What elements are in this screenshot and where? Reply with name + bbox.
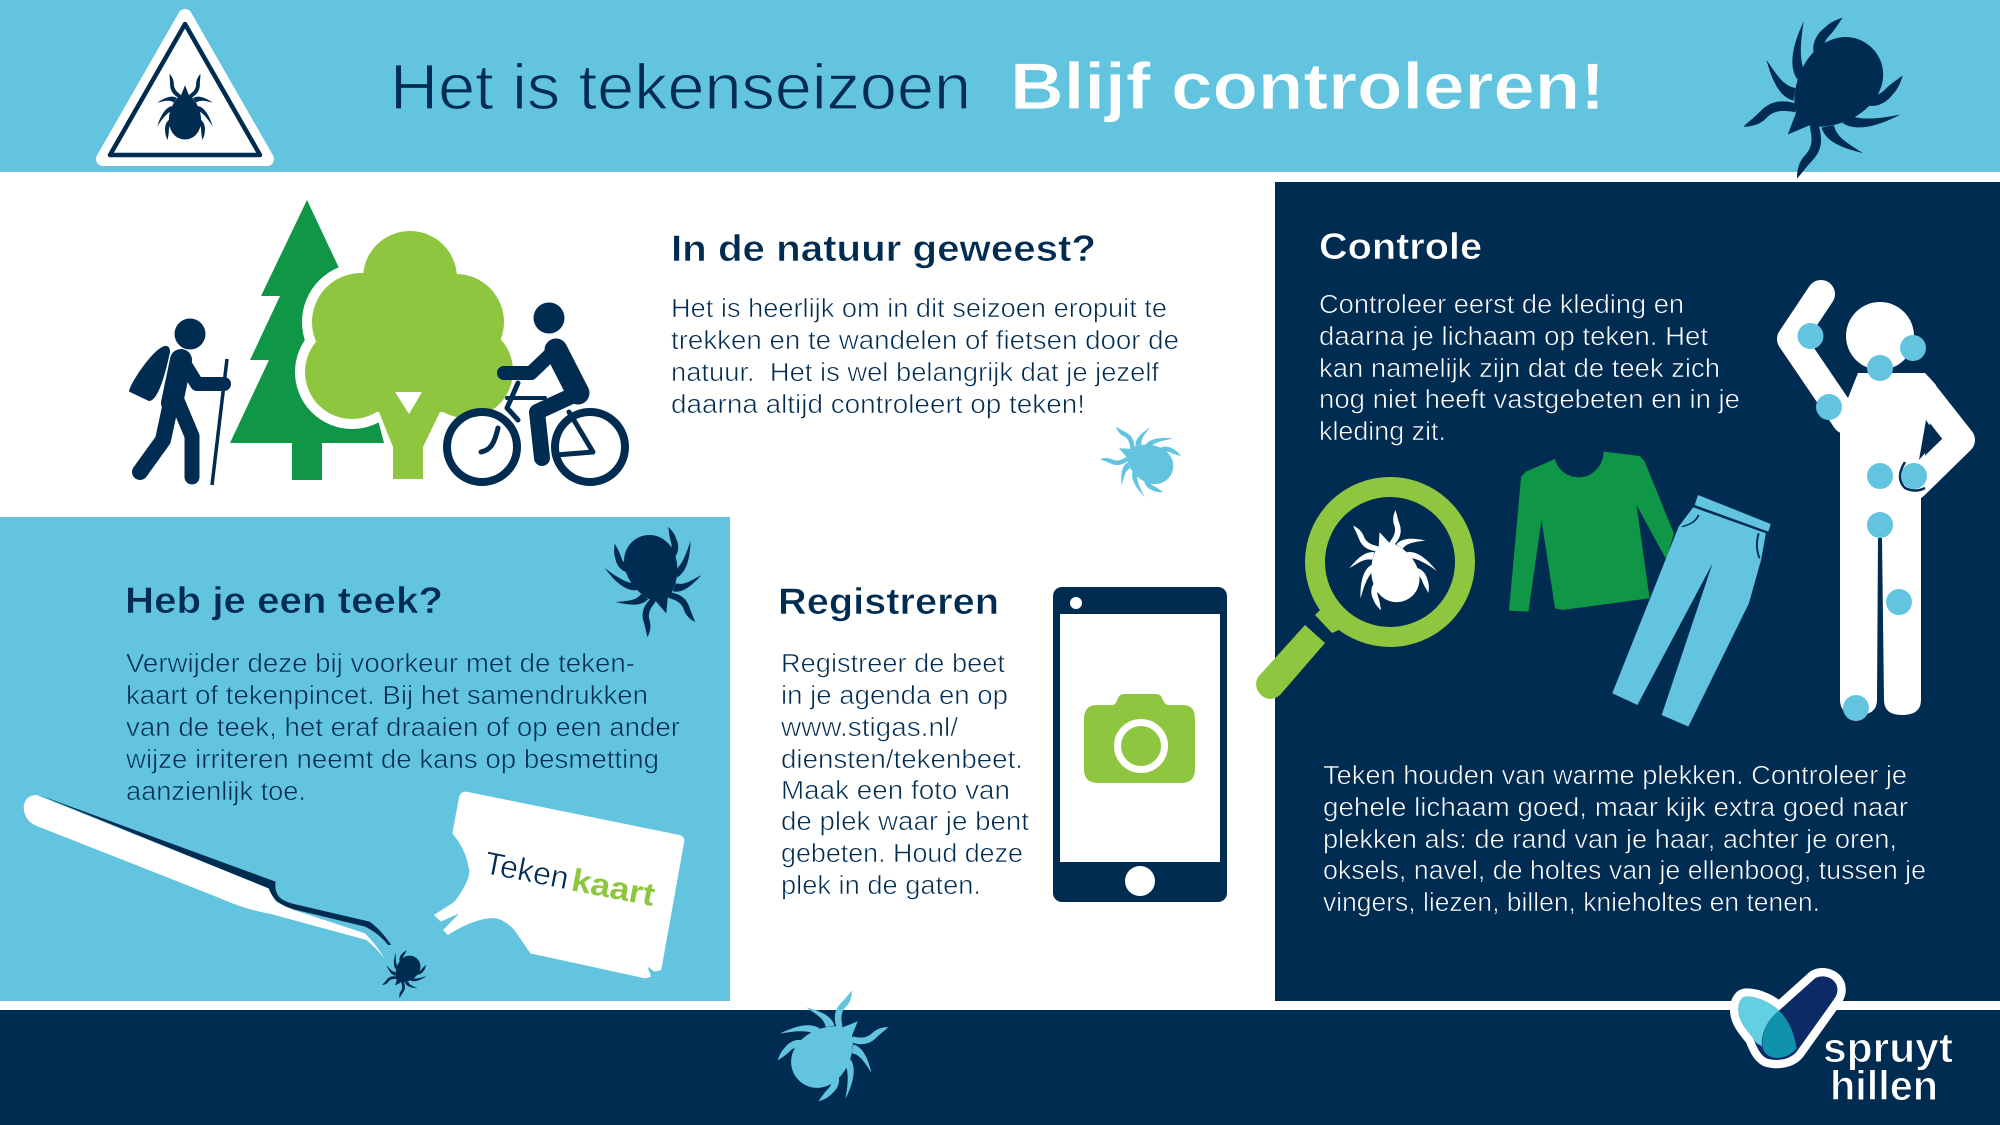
text block: controle: kan namelijk zijn dat de teek zich: [1319, 355, 1720, 383]
tick spots: [1798, 323, 1927, 721]
icon: deciduous tree: [305, 231, 513, 479]
text block: warme plekken: gehele lichaam goed, maar kijk extra goed naar: [1323, 794, 1909, 822]
text block: controle: kleding zit.: [1319, 418, 1446, 446]
text block: natuur: daarna altijd controleert op teken!: [671, 391, 1085, 419]
text block: registreren: Maak een foto van: [781, 777, 1010, 805]
text block: controle: [1319, 291, 1740, 446]
icon: small light blue tick: [1094, 414, 1186, 503]
text block: warme plekken: oksels, navel, de holtes van je ellenboog, tussen je: [1323, 857, 1926, 885]
icon: blue trousers: [1612, 495, 1771, 727]
text block: natuur: [671, 295, 1179, 419]
logo: spruyt hillen: hillen: [1830, 1062, 1938, 1109]
text block: warme plekken: Teken houden van warme plekken. Controleer je: [1323, 762, 1907, 790]
text block: controle: Controleer eerst de kleding en: [1319, 291, 1684, 319]
text block: teek verwijderen: Verwijder deze bij voorkeur met de teken-: [126, 650, 635, 678]
title: Het is tekenseizoen: [390, 51, 971, 123]
logo: spruyt hillen: [1738, 976, 1953, 1109]
icon: warning triangle with tick: [103, 16, 267, 159]
text block: warme plekken: vingers, liezen, billen, knieholtes en tenen.: [1323, 889, 1820, 917]
text block: teek verwijderen: wijze irriteren neemt de kans op besmetting: [125, 746, 659, 774]
icon: light blue tick in footer: [765, 976, 903, 1114]
icon: large tick top right: [1722, 0, 1921, 199]
text block: registreren: diensten/tekenbeet.: [781, 746, 1023, 774]
illustration: hiker, trees and cyclist: [130, 200, 625, 485]
text block: warme plekken: plekken als: de rand van je haar, achter je oren,: [1323, 826, 1897, 854]
heading: heb je een teek: Heb je een teek?: [125, 580, 443, 621]
heading: registreren: Registreren: [778, 581, 999, 622]
footer band: [0, 1010, 2000, 1125]
icon: hiker: [130, 318, 227, 485]
panel: controle background: [1275, 182, 2000, 1001]
text block: controle: nog niet heeft vastgebeten en in je: [1319, 386, 1740, 414]
text block: teek verwijderen: aanzienlijk toe.: [126, 778, 306, 806]
panel: heb je een teek background: [0, 517, 730, 1001]
text block: registreren: www.stigas.nl/: [780, 714, 959, 742]
text block: teek verwijderen: van de teek, het eraf draaien of op een ander: [126, 714, 681, 742]
text block: registreren: [780, 650, 1029, 900]
text block: teek verwijderen: kaart of tekenpincet. Bij het samendrukken: [126, 682, 648, 710]
text block: natuur: trekken en te wandelen of fietsen door de: [671, 327, 1179, 355]
icon: magnifying glass with tick: [1256, 487, 1465, 699]
icon: green sweater: [1509, 452, 1674, 612]
icon: cyclist: [447, 302, 625, 482]
logo mark: [1738, 976, 1837, 1060]
text block: controle: daarna je lichaam op teken. Het: [1319, 323, 1708, 351]
icon: tekenkaart card: Teken: [482, 845, 572, 896]
text block: natuur: natuur. Het is wel belangrijk dat je jezelf: [671, 359, 1160, 387]
icon: fir tree: [230, 200, 384, 480]
text block: warme plekken: [1323, 762, 1926, 917]
icon: tiny tick at tweezers: [375, 946, 432, 1003]
text block: registreren: plek in de gaten.: [781, 872, 981, 900]
icon: navy tick in blue panel: [599, 522, 714, 643]
heading: controle: Controle: [1319, 226, 1482, 267]
header band: [0, 0, 2000, 172]
text block: registreren: de plek waar je bent: [781, 808, 1029, 836]
text block: registreren: in je agenda en op: [781, 682, 1008, 710]
title: [390, 49, 1605, 123]
heading: in de natuur geweest: In de natuur geweest?: [671, 228, 1096, 269]
logo wordmark: spruyt: [1823, 1024, 1953, 1071]
title: Blijf controleren!: [1010, 49, 1605, 123]
icon: smartphone with camera: [1053, 587, 1227, 902]
text block: registreren: gebeten. Houd deze: [781, 840, 1023, 868]
icon: tekenkaart card: [434, 792, 684, 978]
text block: teek verwijderen: [125, 650, 681, 806]
icon: tweezers: [24, 795, 391, 959]
text block: natuur: Het is heerlijk om in dit seizoen eropuit te: [671, 295, 1167, 323]
body silhouette: [1791, 294, 1961, 715]
icon: tekenkaart card: kaart: [569, 862, 658, 913]
icon: body figure with tick spots: [1791, 294, 1961, 721]
text block: registreren: Registreer de beet: [781, 650, 1005, 678]
